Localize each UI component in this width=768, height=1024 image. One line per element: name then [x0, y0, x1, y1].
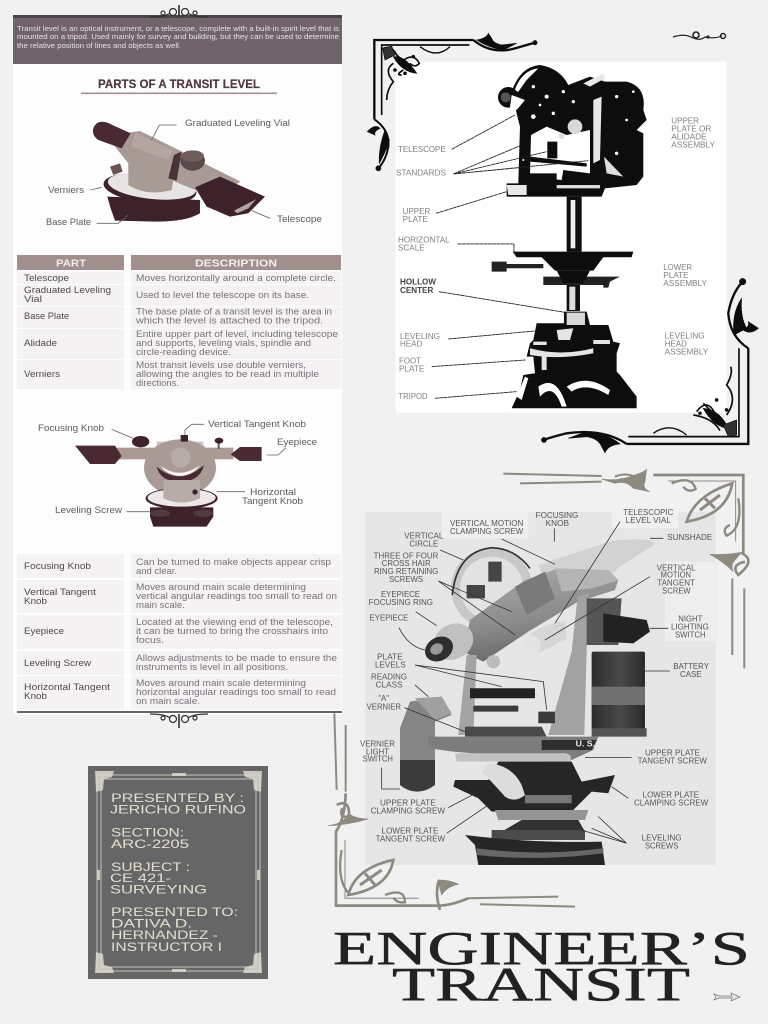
table: parts and descriptions, first group: Vial — [24, 294, 42, 304]
table: parts and descriptions, second group: Leveling Screw — [24, 658, 92, 668]
presented to: DATIVA D. — [111, 918, 192, 930]
photograph labels: CLAMPING SCREW — [371, 807, 445, 816]
photograph labels: TANGENT SCREW — [638, 756, 707, 765]
image: annotated transit photograph — [360, 508, 716, 865]
presented by: PRESENTED BY : — [111, 792, 244, 805]
section: SECTION: — [111, 826, 184, 840]
diagram labels: CENTER — [400, 286, 434, 295]
diagram labels: UPPER — [671, 116, 699, 125]
intro text banner: Transit level is an optical instrument, or a telescope, complete with a built-in spirit level that is — [17, 24, 339, 33]
table: parts and descriptions, first group: Alidade — [24, 338, 57, 348]
intro text banner: mounted on a tripod. Used mainly for survey and building, but they can be used to determine — [17, 32, 339, 41]
photograph labels: UPPER PLATE — [380, 799, 436, 808]
diagram labels: HORIZONTAL — [398, 235, 450, 244]
diagram labels: HEAD — [400, 339, 423, 348]
diagram labels: UPPER — [403, 207, 431, 216]
ornament: grey frame bottom-left corner — [328, 713, 575, 910]
section: ARC-2205 — [111, 838, 189, 851]
leader lines — [382, 522, 670, 843]
diagram labels: ASSEMBLY — [671, 141, 716, 150]
photograph labels: LOWER PLATE — [643, 790, 699, 799]
photograph labels: LEVEL VIAL — [626, 516, 672, 525]
label: Verniers: Verniers — [48, 185, 84, 195]
illustration: transit level front view — [75, 424, 286, 527]
instrument photograph — [400, 539, 655, 865]
title: TRANSIT — [392, 958, 690, 1012]
intro text banner: the relative position of lines and objects as well. — [17, 41, 181, 50]
photograph labels: READING — [371, 673, 407, 682]
table: parts and descriptions, first group: The base plate of a transit level is the area in — [136, 306, 332, 316]
table: parts and descriptions, second group: Allows adjustments to be made to ensure the — [136, 653, 337, 663]
photograph labels: KNOB — [546, 519, 569, 528]
presented by — [110, 792, 246, 816]
illustration: transit level perspective view — [91, 122, 270, 223]
instrument silhouette — [492, 65, 647, 408]
table: parts and descriptions, second group: Can be turned to make objects appear crisp — [136, 557, 331, 567]
table: parts and descriptions, first group — [17, 255, 341, 389]
photograph labels: LIGHT — [366, 747, 389, 756]
photograph labels: SCREW — [662, 586, 691, 595]
photograph labels: U. S. — [576, 740, 595, 749]
label: Vertical Tangent Knob: Vertical Tangent Knob — [208, 419, 306, 429]
photograph labels: UPPER PLATE — [645, 748, 700, 757]
photograph labels: NIGHT — [678, 614, 702, 623]
table: parts and descriptions, first group: Graduated Leveling — [24, 285, 111, 295]
photograph labels: TELESCOPIC — [623, 508, 674, 517]
table: parts and descriptions, second group: Focusing Knob — [24, 561, 91, 571]
table: parts and descriptions, second group: Moves around main scale determining — [136, 582, 306, 592]
table: parts and descriptions, first group: DESCRIPTION — [195, 258, 277, 270]
photograph labels: CLAMPING SCREW — [450, 527, 524, 536]
subject: SUBJECT : — [111, 861, 190, 874]
table: parts and descriptions, second group: Vertical Tangent — [24, 587, 97, 597]
photograph labels — [360, 508, 712, 851]
photograph labels: CLAMPING SCREW — [634, 798, 709, 807]
photograph labels: EYEPIECE — [381, 590, 420, 599]
ornament: black frame bottom-right corner — [541, 278, 758, 453]
label: Horizontal Tangent Knob: Tangent Knob — [242, 496, 303, 506]
panel: parts of a transit level — [13, 5, 342, 715]
icon: top flourish — [150, 5, 208, 17]
presented to — [111, 906, 238, 954]
photograph labels: SUNSHADE — [667, 533, 712, 542]
photograph labels: MOTION — [661, 570, 691, 579]
table: parts and descriptions, first group: circle-reading device. — [136, 347, 231, 357]
table: parts and descriptions, second group — [17, 554, 341, 709]
label: Leveling Screw: Leveling Screw — [55, 505, 122, 515]
diagram labels: SCALE — [398, 243, 425, 252]
title: ENGINEER’S — [333, 922, 750, 976]
diagram labels: PLATE — [663, 271, 689, 280]
table: parts and descriptions, second group: and clear. — [136, 566, 177, 576]
photograph labels: PLATE — [377, 652, 403, 661]
photograph labels: VERTICAL — [404, 531, 444, 540]
diagram labels: LEVELING — [400, 332, 440, 341]
table: parts and descriptions, first group: Verniers — [24, 369, 61, 379]
diagram labels: ALIDADE — [671, 133, 707, 142]
icon: arrow — [714, 993, 740, 1001]
table: parts and descriptions, first group: Telescope — [24, 273, 69, 283]
photograph labels: LEVELING — [642, 834, 682, 843]
diagram labels: PLATE — [399, 364, 424, 373]
presented to: PRESENTED TO: — [111, 906, 238, 919]
table: parts and descriptions, first group: Moves horizontally around a complete circle. — [136, 273, 336, 283]
presented by: JERICHO RUFINO — [110, 804, 246, 816]
table: parts and descriptions, second group: main scale. — [136, 600, 185, 610]
photograph labels: LOWER PLATE — [382, 826, 438, 835]
label: Horizontal Tangent Knob: Horizontal — [250, 487, 296, 497]
table: parts and descriptions, first group: Used to level the telescope on its base. — [136, 290, 309, 300]
photograph labels: TANGENT — [657, 578, 695, 587]
table: parts and descriptions, first group: Most transit levels use double verniers, — [136, 360, 306, 370]
label: Graduated Leveling Vial: Graduated Leveling Vial — [185, 118, 290, 128]
photograph labels: CLASS — [376, 681, 403, 690]
table: parts and descriptions, second group: Knob — [24, 691, 47, 701]
diagram labels: LOWER — [663, 263, 692, 272]
label: Horizontal Tangent Knob — [242, 487, 303, 506]
label: Telescope: Telescope — [277, 214, 322, 224]
diagram labels: LEVELING — [665, 331, 705, 340]
photograph labels: CROSS HAIR — [382, 559, 431, 568]
table: parts and descriptions, second group: Knob — [24, 596, 47, 606]
diagram labels: TELESCOPE — [398, 145, 446, 154]
photograph labels: RING RETAINING — [374, 567, 438, 576]
photograph labels: VERTICAL — [657, 563, 696, 572]
diagram labels: ASSEMBLY — [665, 347, 709, 356]
table: parts and descriptions, second group: Horizontal Tangent — [24, 682, 111, 692]
intro text banner — [13, 15, 342, 64]
table: parts and descriptions, second group: on main scale. — [136, 696, 200, 706]
subject — [110, 861, 207, 896]
photograph labels: VERNIER — [360, 739, 395, 748]
table: parts and descriptions, second group: it can be turned to bring the crosshairs into — [136, 626, 328, 636]
diagram labels: ASSEMBLY — [663, 279, 708, 288]
table: parts and descriptions, first group: and supports, leveling vials, spindle and — [136, 338, 311, 348]
leader lines — [432, 115, 588, 398]
table: parts and descriptions, first group: directions. — [136, 378, 179, 388]
diagram labels: HOLLOW — [400, 278, 436, 287]
diagram labels: PLATE OR — [671, 125, 712, 134]
photograph labels: VERNIER — [367, 703, 401, 712]
photograph labels: CIRCLE — [409, 539, 438, 548]
table: parts and descriptions, second group: instruments is level in all positions. — [136, 662, 288, 672]
table: parts and descriptions, second group: horizontal angular readings too small to read — [136, 687, 336, 697]
table: parts and descriptions, second group: Eyepiece — [24, 626, 64, 636]
icon: small top-right flourish — [673, 32, 726, 39]
decorative frame — [95, 771, 262, 973]
photograph labels: LEVELS — [375, 660, 406, 669]
table: parts and descriptions, first group: allowing the angles to be read in multiple — [136, 369, 319, 379]
photograph labels: CASE — [680, 670, 702, 679]
photograph labels: TANGENT SCREW — [376, 834, 445, 843]
label: Eyepiece: Eyepiece — [277, 437, 317, 447]
ornament: black frame top-left corner — [367, 33, 537, 171]
subject: CE 421- — [110, 872, 171, 885]
photograph labels: THREE OF FOUR — [374, 551, 439, 560]
diagram labels: TRIPOD — [398, 392, 428, 401]
presented to: HERNANDEZ - — [111, 929, 218, 942]
diagram labels: FOOT — [399, 356, 421, 365]
photograph labels: LIGHTING — [671, 622, 709, 631]
icon: bottom flourish — [17, 711, 342, 728]
photograph labels: "A" — [378, 694, 389, 703]
photograph labels: EYEPIECE — [370, 613, 408, 622]
diagram labels — [396, 116, 716, 401]
label: Base Plate: Base Plate — [46, 217, 91, 227]
image: black and white transit diagram — [396, 62, 727, 413]
photograph labels: BATTERY — [673, 662, 710, 671]
table: parts and descriptions, first group: Base Plate — [24, 311, 69, 321]
table: parts and descriptions, second group: Moves around main scale determining — [136, 678, 306, 688]
title — [333, 922, 750, 1012]
diagram labels: STANDARDS — [396, 169, 446, 178]
photograph labels: SCREWS — [389, 575, 423, 584]
ornament: grey frame top-right corner — [503, 469, 748, 668]
table: parts and descriptions, first group: PART — [56, 258, 86, 270]
photograph labels: SWITCH — [675, 630, 706, 639]
diagram labels: HEAD — [665, 339, 687, 348]
table: parts and descriptions, second group: Located at the viewing end of the telescope, — [136, 617, 333, 627]
photograph labels: VERTICAL MOTION — [450, 519, 524, 528]
table: parts and descriptions, first group: Entire upper part of level, including telescope — [136, 329, 338, 339]
heading: PARTS OF A TRANSIT LEVEL — [98, 79, 260, 91]
table: parts and descriptions, second group: focus. — [136, 635, 164, 645]
table: parts and descriptions, first group: which the level is attached to the tripod. — [135, 316, 323, 326]
table: parts and descriptions, second group: vertical angular readings too small to read on — [136, 591, 337, 601]
section — [111, 826, 189, 851]
photograph labels: SCREWS — [645, 842, 678, 851]
photograph labels: SWITCH — [363, 755, 393, 764]
label: Focusing Knob: Focusing Knob — [38, 423, 104, 433]
subject: SURVEYING — [110, 884, 207, 896]
presented to: INSTRUCTOR I — [111, 941, 222, 954]
photograph labels: FOCUSING — [536, 511, 578, 520]
photograph labels: FOCUSING RING — [369, 598, 433, 607]
diagram labels: PLATE — [403, 215, 428, 224]
panel: presenter credits — [88, 766, 268, 979]
